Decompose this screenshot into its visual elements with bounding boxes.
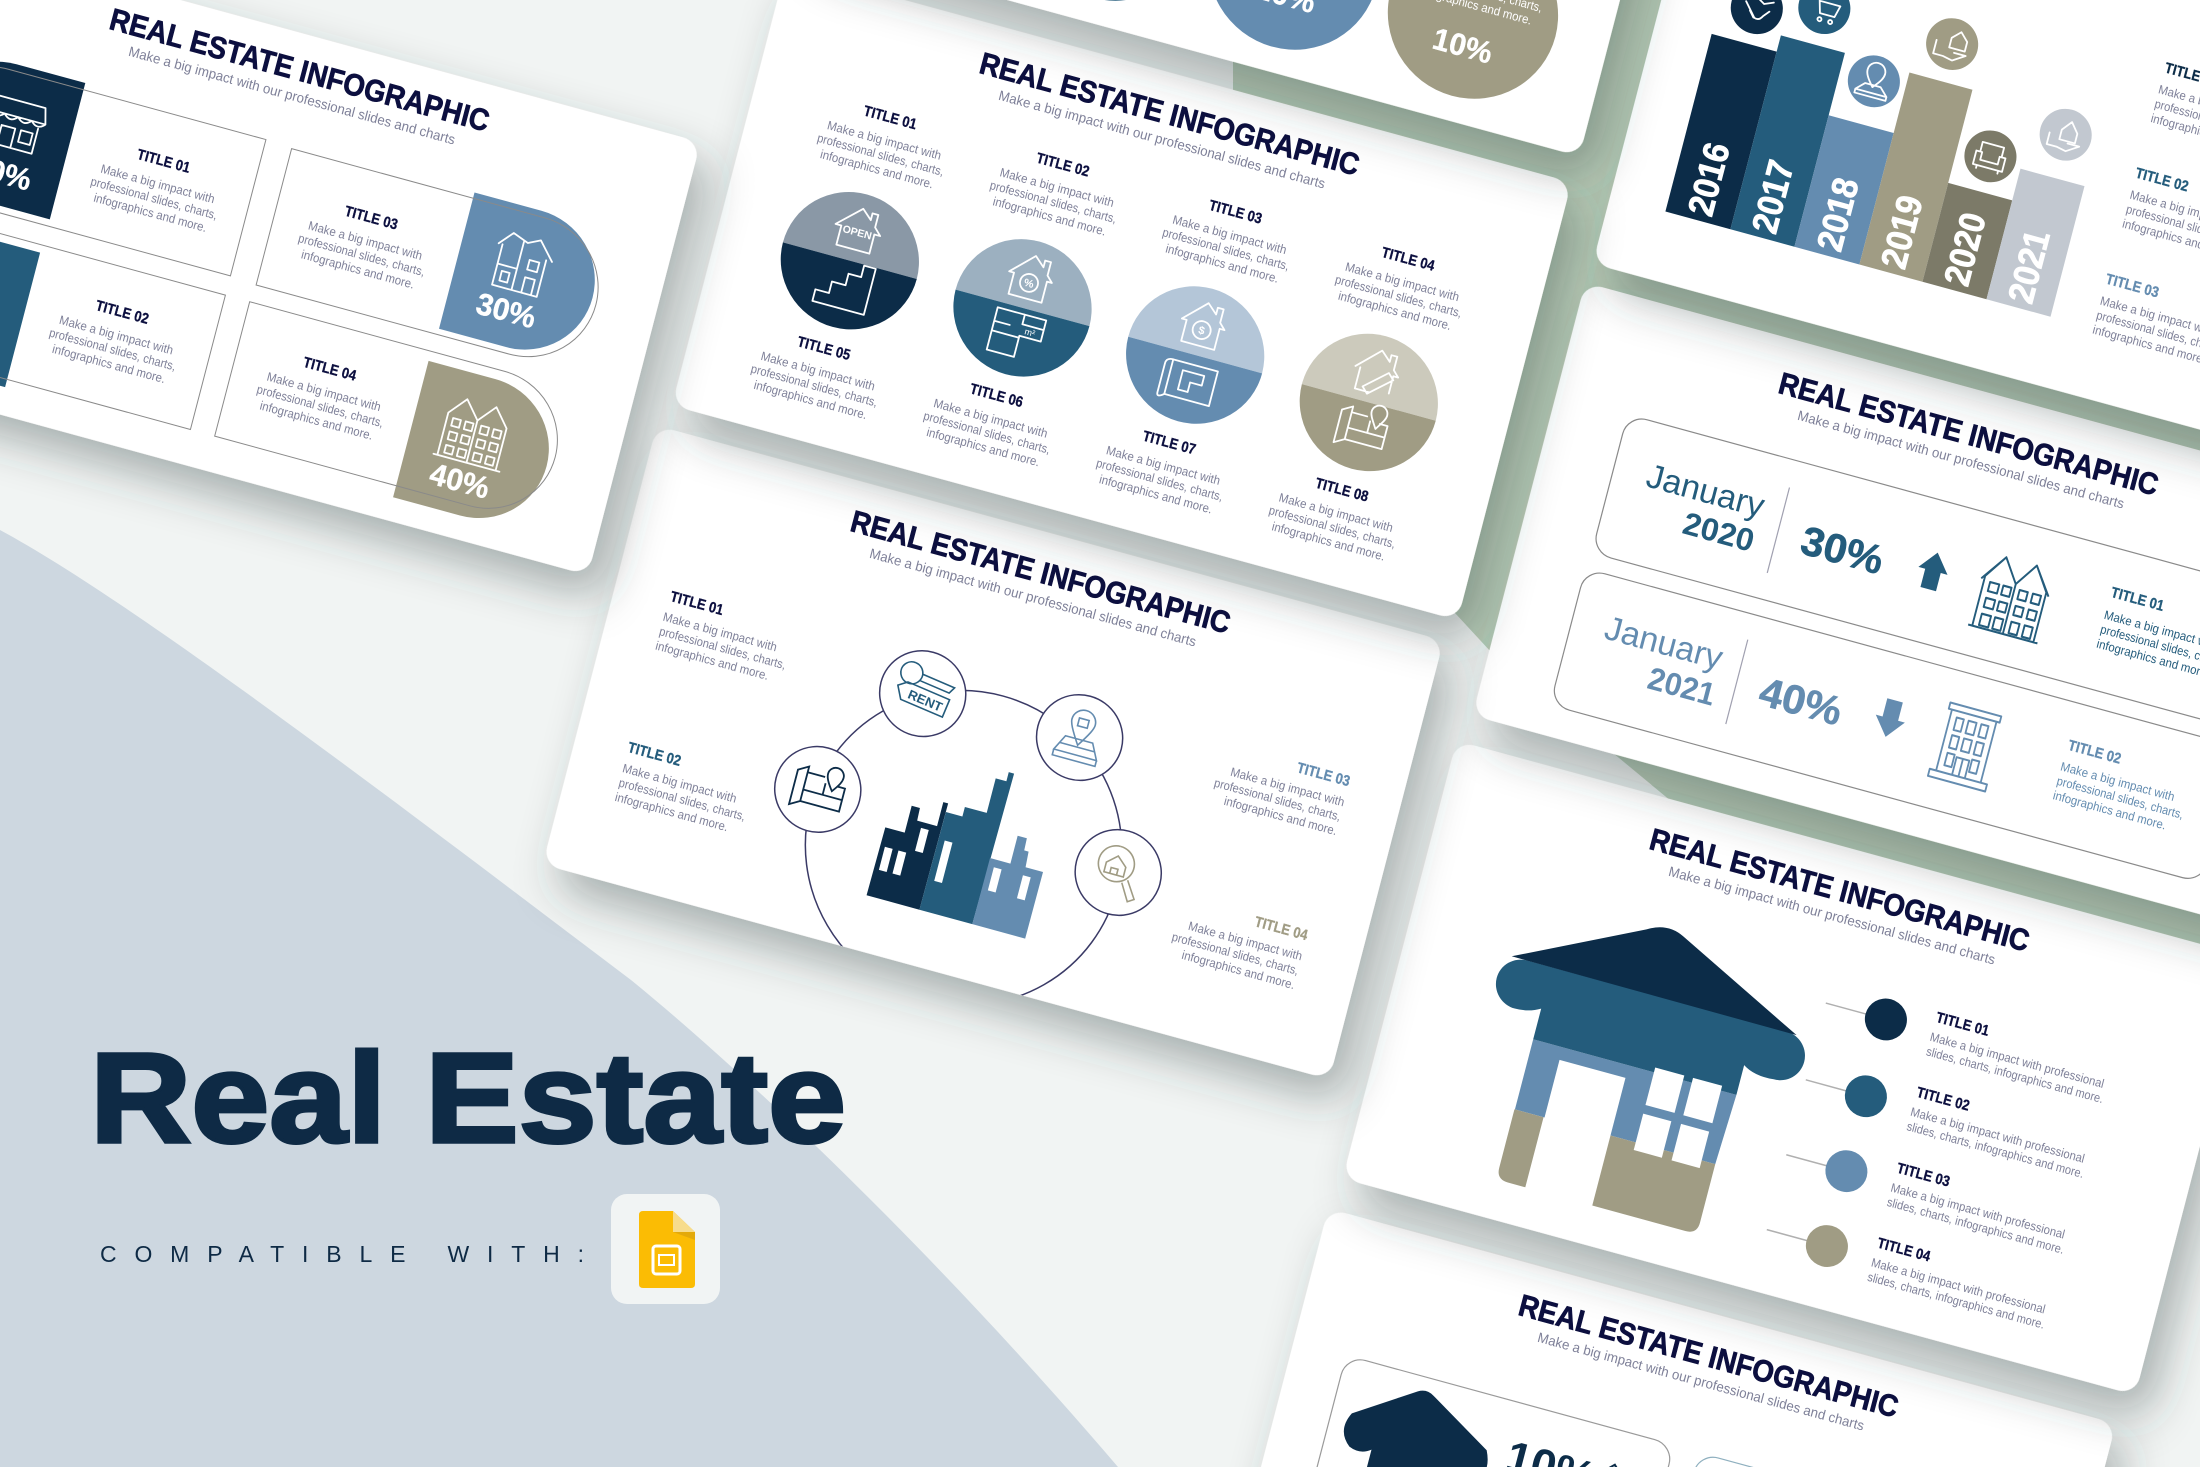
text: title 01: [812, 93, 955, 193]
row: january 2020: 30%: [1796, 517, 1888, 583]
text: title 04: TITLE 04: [1253, 914, 1310, 944]
text: title 02: professional slides, charts,: [988, 178, 1118, 226]
icon: google slides: [611, 1194, 720, 1304]
item: title 01: [1819, 980, 2114, 1106]
slide: centre, circular city diagram: REAL ESTATE INFOGRAPHIC: [847, 504, 1234, 641]
text: title 02: [985, 140, 1128, 240]
card: title 03: [256, 143, 615, 373]
text: title 03: TITLE 03: [1207, 197, 1264, 228]
text: title 01: infographics and more.: [654, 639, 770, 683]
slide: bottom, house percentages: [1215, 1209, 2116, 1467]
row: january 2020: [1592, 414, 2200, 731]
card: title 02: TITLE 02: [94, 297, 150, 328]
slide: january date comparison: [1472, 283, 2200, 931]
text: title 02: infographics and more.: [991, 194, 1107, 239]
row: january 2020: January: [1642, 457, 1768, 525]
split circle 2: percent house and floor plan: %: [1023, 277, 1035, 291]
row: january 2021: 40%: [1755, 668, 1847, 734]
icon: hand holding house: [1920, 12, 1984, 76]
text: title 04: Make a big impact with: [1187, 919, 1304, 963]
text: title 08: TITLE 08: [1313, 475, 1370, 506]
bar chart: 2016 to 2021: 2021: [2000, 226, 2058, 308]
icon: apartment building: [433, 394, 515, 472]
card: title 01: professional slides, charts,: [89, 174, 219, 222]
bar chart: 2016 to 2021: [1665, 18, 2101, 317]
text: title 01: Make a big impact with: [662, 610, 779, 654]
text: title 08: Make a big impact with: [1277, 491, 1394, 535]
text: title 03: TITLE 03: [1295, 759, 1352, 790]
row: january 2021: January: [1601, 609, 1727, 678]
split circle 1: open house and stairs: OPEN: [841, 224, 873, 243]
slide: eight split circles: [672, 0, 1572, 620]
subtitle: compatible with: COMPATIBLE WITH:: [100, 1241, 584, 1267]
text: title 01: professional slides, charts,: [658, 624, 787, 672]
row: january 2021: [1550, 569, 2200, 883]
split circle 2: percent house and floor plan: m²: [1024, 326, 1036, 339]
slide: bottom, house percentages: Make a big impact with our professional slides and charts: [1536, 1329, 1866, 1433]
text: title 07: Make a big impact with: [1105, 443, 1222, 488]
text: title 02: Make a big impact with: [998, 165, 1115, 210]
text: title 05: [746, 323, 889, 424]
slide: top left, pill cards: [0, 0, 701, 575]
icon: dark house: [1314, 1373, 1501, 1467]
card: title 03: professional slides, charts,: [297, 231, 426, 279]
text: title 05: TITLE 05: [795, 333, 852, 364]
card: title 03: TITLE 03: [343, 203, 399, 234]
background shape: sage green: [1233, 0, 2200, 1080]
text: title 06: infographics and more.: [925, 425, 1041, 469]
row: january 2021: infographics and more.: [2052, 788, 2168, 833]
split circle 3: dollar house and blueprint: $: [1197, 324, 1206, 338]
card: title 01: TITLE 01: [135, 146, 192, 177]
item: title 01: Make a big impact with professional: [1928, 1030, 2106, 1091]
text: title 01: Make a big impact with: [826, 118, 943, 163]
text: title 04: TITLE 04: [1380, 244, 1437, 275]
icon: handshake: [1725, 0, 1789, 40]
row: january 2021: 2021: [1644, 660, 1719, 713]
text: title 05: professional slides, charts,: [749, 362, 879, 410]
split circle 4: renovation house and map pin: [1285, 318, 1453, 487]
card: title 02: [0, 206, 225, 437]
icon: shopping cart: [1793, 0, 1856, 40]
slide: house with four titles: REAL ESTATE INFOGRAPHIC: [1646, 822, 2033, 959]
slide: yearly bar chart: [1593, 0, 2200, 478]
icon: location on land: [1842, 49, 1906, 113]
text: title 07: [1091, 418, 1234, 518]
bar chart: 2016 to 2021: 2020: [1936, 208, 1994, 290]
card: title 04: TITLE 04: [301, 354, 359, 385]
text: title 02: TITLE 02: [2134, 165, 2190, 195]
text: title 01: [654, 588, 797, 687]
card: title 02: Make a big impact with: [58, 313, 175, 357]
icon: location on map: [1027, 685, 1132, 790]
text: title 03: infographics and more.: [1222, 794, 1338, 838]
arrow: up: [1914, 549, 1952, 593]
card: title 03: Make a big impact with: [307, 219, 424, 263]
text: title 08: [1264, 465, 1407, 566]
split circle 3: dollar house and blueprint: [1111, 271, 1279, 440]
text: title 07: TITLE 07: [1141, 428, 1197, 458]
text: title 03: [1157, 187, 1301, 288]
text: title 01: infographics and more.: [819, 147, 935, 191]
text: title 04: infographics and more.: [1337, 289, 1453, 333]
text: title 05: Make a big impact with: [759, 349, 876, 393]
item: title 03: Make a big impact with professional: [1889, 1181, 2066, 1242]
card: title 01: [0, 44, 268, 276]
text: title 02: TITLE 02: [626, 739, 683, 770]
text: title 06: professional slides, charts,: [922, 409, 1052, 457]
title: Real Estate: [90, 1027, 846, 1170]
text: title 01: [2149, 59, 2200, 159]
text: title 02: infographics and more.: [614, 790, 730, 834]
text: title 03: professional slides, charts,: [1161, 225, 1291, 273]
slide: january date comparison: Make a big impact with our professional slides and charts: [1796, 407, 2126, 511]
background shape: blue-grey wave: [0, 530, 1118, 1467]
card: title 03: 30%: [473, 286, 540, 335]
text: title 04: [1330, 234, 1473, 335]
text: title 04: infographics and more.: [1180, 948, 1296, 992]
ring: [804, 690, 1122, 996]
text: title 07: infographics and more.: [1098, 472, 1214, 516]
icon: rent key: [870, 641, 975, 746]
item: title 04: TITLE 04: [1875, 1235, 1933, 1266]
text: title 04: Make a big impact with: [1344, 260, 1461, 304]
circle: teal: [1010, 0, 1218, 20]
item: title 01: TITLE 01: [1934, 1009, 1991, 1040]
icon: house under magnifier: [1066, 820, 1171, 925]
row: january 2021: professional slides, charts,: [2055, 774, 2185, 822]
text: title 02: TITLE 02: [1034, 150, 1091, 180]
item: title 03: [1780, 1131, 2075, 1257]
text: title 04: [1167, 893, 1310, 992]
item: title 02: Make a big impact with professional: [1909, 1105, 2086, 1166]
circle: 10 percent: [1369, 0, 1577, 118]
text: title 02: [614, 739, 756, 838]
item: title 03: slides, charts, infographics and more.: [1885, 1195, 2066, 1257]
text: title 04: professional slides, charts,: [1334, 272, 1463, 320]
text: title 03: TITLE 03: [2104, 271, 2161, 301]
slide: centre, circular city diagram: Make a big impact with our professional slides and charts: [868, 545, 1198, 649]
item: title 02: TITLE 02: [1915, 1084, 1971, 1115]
bar chart: 2016 to 2021: 2018: [1808, 173, 1867, 255]
card: title 01: infographics and more.: [92, 191, 208, 235]
text: title 08: professional slides, charts,: [1267, 503, 1397, 551]
slide: january date comparison: REAL ESTATE INFOGRAPHIC: [1775, 366, 2162, 503]
text: title 03: Make a big impact with: [1171, 213, 1288, 257]
icon: map with pin: [765, 737, 870, 842]
text: title 05: infographics and more.: [752, 378, 868, 422]
bar chart: 2016 to 2021: 2017: [1744, 156, 1802, 238]
slide: house with four titles: Make a big impact with our professional slides and charts: [1667, 863, 1997, 967]
icon: office building: [1928, 702, 2004, 791]
bar chart: 2016 to 2021: 2019: [1873, 191, 1931, 273]
slide: centre, circular city diagram: [535, 426, 1444, 1108]
card: title 04: Make a big impact with: [265, 370, 382, 414]
icon: two-storey house: [488, 230, 556, 298]
icon: store: [0, 94, 49, 155]
text: title 03: infographics and more.: [1164, 242, 1280, 286]
split circle 1: open house and stairs: [766, 176, 934, 345]
text: title 02: professional slides, charts,: [617, 776, 747, 824]
slide: bottom, house percentages: REAL ESTATE INFOGRAPHIC: [1515, 1288, 1902, 1425]
row: january 2020: 2020: [1679, 505, 1758, 559]
text: title 06: TITLE 06: [968, 381, 1025, 411]
item: title 03: TITLE 03: [1895, 1160, 1952, 1191]
slide: eight split circles: Make a big impact with our professional slides and charts: [997, 87, 1327, 191]
item: title 01: slides, charts, infographics and more.: [1925, 1044, 2105, 1106]
text: title 01: TITLE 01: [668, 588, 725, 619]
icon: apartment building: [1968, 552, 2056, 643]
illustration: city skyline: [867, 744, 1065, 939]
text: title 03: [1209, 739, 1352, 838]
icon: hand with house: [2034, 103, 2097, 167]
split circle 2: percent house and floor plan: [938, 223, 1107, 392]
card: title 03: infographics and more.: [300, 247, 416, 292]
text: title 03: [2091, 271, 2200, 371]
slide: house with four titles: [1343, 741, 2200, 1395]
item: title 04: slides, charts, infographics and more.: [1866, 1270, 2046, 1332]
icon: rent key: RENT: [906, 687, 945, 715]
text: title 04: professional slides, charts,: [1170, 930, 1300, 978]
card: title 04: [212, 302, 573, 536]
item: title 02: [1800, 1055, 2095, 1181]
card: title 04: 40%: [426, 456, 493, 506]
text: title 02: [2121, 165, 2200, 264]
slide: top centre, percentage circles: [805, 0, 1693, 156]
card: title 02: professional slides, charts,: [48, 326, 177, 374]
text: title 07: professional slides, charts,: [1095, 456, 1224, 504]
card: title 04: professional slides, charts,: [255, 382, 385, 430]
icon: armchair: [1959, 125, 2022, 188]
slide: top left, pill cards: Make a big impact with our professional slides and charts: [127, 43, 457, 147]
item: title 02: slides, charts, infographics and more.: [1905, 1119, 2085, 1181]
text: title 06: [918, 370, 1062, 471]
text: title 06: Make a big impact with: [932, 396, 1049, 441]
circle: 20 percent: [1190, 0, 1397, 69]
arrow: down: [1871, 696, 1910, 741]
bar chart: 2016 to 2021: 2016: [1679, 138, 1738, 220]
text: title 08: infographics and more.: [1270, 519, 1386, 564]
row: january 2020: TITLE 01: [2109, 584, 2166, 615]
text: title 01: professional slides, charts,: [816, 131, 945, 179]
circle: 10 percent: 10%: [1429, 21, 1496, 70]
card: title 01: Make a big impact with: [99, 162, 216, 206]
text: title 03: professional slides, charts,: [1213, 776, 1342, 824]
card: title 02: infographics and more.: [51, 342, 167, 386]
text: title 03: Make a big impact with: [1229, 765, 1346, 809]
slide: top left, pill cards: REAL ESTATE INFOGRAPHIC: [106, 2, 493, 139]
text: title 01: TITLE 01: [862, 103, 918, 133]
row: january 2021: TITLE 02: [2066, 737, 2123, 768]
slide: eight split circles: REAL ESTATE INFOGRAPHIC: [976, 46, 1363, 183]
text: title 02: Make a big impact with: [621, 761, 738, 806]
row: january 2021: Make a big impact with: [2059, 760, 2176, 804]
card: title 04: infographics and more.: [258, 399, 374, 443]
illustration: house: [1448, 888, 1828, 1250]
item: title 04: [1760, 1206, 2055, 1332]
item: title 04: Make a big impact with professional: [1870, 1256, 2047, 1316]
